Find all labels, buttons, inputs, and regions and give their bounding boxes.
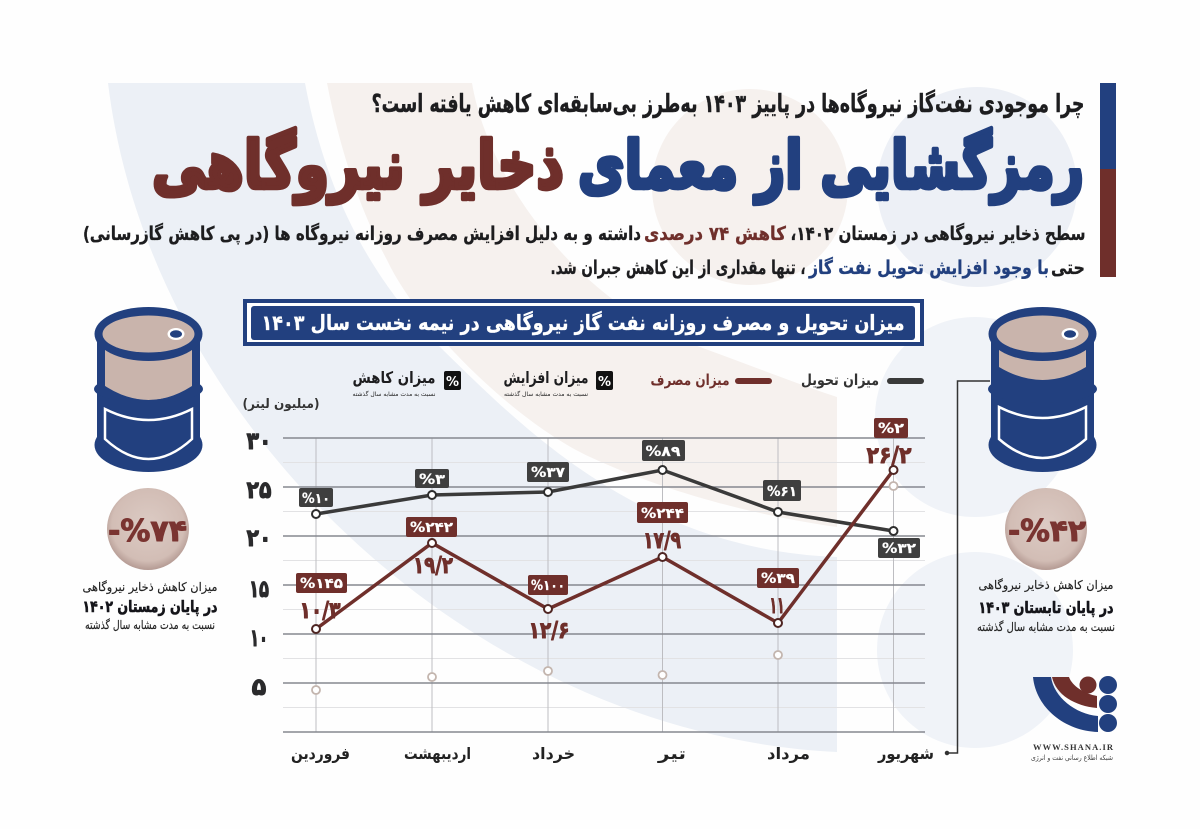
legend: increase: % [598, 375, 611, 390]
consumption change tags: %۲۴۴ [641, 506, 684, 522]
winter caption: نسبت به مدت مشابه سال گذشته [85, 618, 215, 632]
legend [352, 368, 924, 398]
main title: ذخایر نیروگاهی [152, 127, 564, 205]
delivery change tags: %۶۱ [767, 484, 797, 500]
legend: delivery: میزان تحویل [801, 371, 879, 389]
logo: Shana: WWW.SHANA.IR [1033, 742, 1114, 752]
intro paragraph [83, 222, 1086, 279]
summer caption: در پایان تابستان ۱۴۰۳ [978, 598, 1114, 618]
intro paragraph: کاهش ۷۴ درصدی [644, 223, 787, 245]
winter caption: میزان کاهش ذخایر نیروگاهی [82, 580, 218, 595]
delivery change tags: %۳ [419, 472, 446, 488]
chart title banner: میزان تحویل و مصرف روزانه نفت گاز نیروگاهی در نیمه نخست سال ۱۴۰۳ [262, 310, 904, 335]
summer drop badge [1005, 488, 1087, 570]
consumption values: ۱۷/۹ [643, 528, 681, 554]
delivery change tags: %۳۷ [531, 465, 565, 481]
y axis labels: ۱۰ [250, 624, 268, 652]
summer caption: نسبت به مدت مشابه سال گذشته [977, 620, 1115, 634]
legend: decrease: میزان کاهش [352, 368, 436, 387]
logo: Shana [1031, 676, 1117, 762]
y axis labels: ۱۵ [249, 575, 269, 603]
delivery change tags [299, 440, 920, 558]
month labels: شهریور [877, 744, 934, 763]
delivery line [312, 466, 898, 535]
delivery change tags: %۳۲ [882, 541, 916, 557]
legend: increase [504, 368, 613, 398]
consumption change tags: %۲۴۲ [410, 520, 453, 536]
legend: decrease: % [446, 375, 459, 390]
y axis unit: (میلیون لیتر) [242, 397, 320, 412]
consumption values: ۲۶/۲ [866, 443, 912, 469]
winter drop badge: -%۷۴ [108, 514, 187, 549]
month labels: فروردین [291, 744, 350, 763]
consumption change tags [296, 418, 908, 595]
legend: decrease [352, 368, 461, 398]
consumption change tags: %۲ [878, 421, 905, 437]
main title [152, 127, 1084, 205]
line chart [242, 397, 934, 763]
intro paragraph: با وجود افزایش تحویل نفت گاز [808, 256, 1049, 279]
background: oversized logo shapes [108, 83, 1077, 752]
intro paragraph: حتی [1051, 257, 1085, 279]
delivery change tags: %۱۰ [302, 491, 330, 507]
consumption line [312, 466, 898, 633]
consumption values: ۱۱ [770, 593, 784, 619]
consumption change tags: %۱۴۵ [300, 576, 343, 592]
month labels [291, 744, 934, 763]
month labels: تیر [657, 744, 686, 763]
winter caption [82, 580, 218, 632]
logo: Shana: شبکه اطلاع رسانی نفت و انرژی [1031, 754, 1113, 762]
y axis labels: ۲۰ [246, 524, 272, 552]
consumption change tags: %۳۹ [761, 571, 795, 587]
icon: barrel winter [94, 307, 203, 472]
icon: barrel summer [988, 307, 1097, 472]
consumption change tags: %۱۰۰ [531, 578, 565, 594]
intro paragraph: سطح ذخایر نیروگاهی در زمستان ۱۴۰۲، [790, 222, 1086, 245]
summer caption: میزان کاهش ذخایر نیروگاهی [978, 578, 1114, 593]
legend: decrease: نسبت به مدت مشابه سال گذشته [352, 390, 436, 398]
summer drop badge: -%۴۲ [1008, 514, 1086, 549]
consumption values [300, 443, 912, 644]
legend: increase: میزان افزایش [504, 368, 588, 387]
intro paragraph: داشته و به دلیل افزایش مصرف روزانه نیروگاه ها (در پی کاهش گازرسانی) [83, 222, 641, 245]
winter drop badge [107, 488, 189, 570]
month labels: مرداد [767, 744, 810, 763]
month labels: اردیبهشت [404, 744, 471, 763]
consumption values: ۱۹/۲ [413, 553, 453, 579]
y axis labels: ۵ [252, 673, 266, 701]
y axis labels [246, 427, 272, 701]
y axis labels: ۲۵ [246, 476, 272, 504]
pale previous-year markers [312, 482, 898, 694]
intro paragraph: ، تنها مقداری از این کاهش جبران شد. [550, 257, 806, 279]
consumption values: ۱۲/۶ [528, 618, 570, 644]
header accent bar [1100, 83, 1116, 277]
winter caption: در پایان زمستان ۱۴۰۲ [82, 597, 218, 617]
chart title banner [243, 299, 924, 346]
connector from right barrel to Shahrivar [946, 381, 990, 754]
legend: increase: نسبت به مدت مشابه سال گذشته [504, 390, 588, 398]
summer caption [977, 578, 1115, 634]
delivery change tags: %۸۹ [646, 444, 681, 460]
legend: consumption: میزان مصرف [650, 371, 730, 389]
consumption values: ۱۰/۳ [300, 598, 340, 624]
month labels: خرداد [532, 744, 575, 763]
y axis labels: ۳۰ [246, 427, 272, 455]
